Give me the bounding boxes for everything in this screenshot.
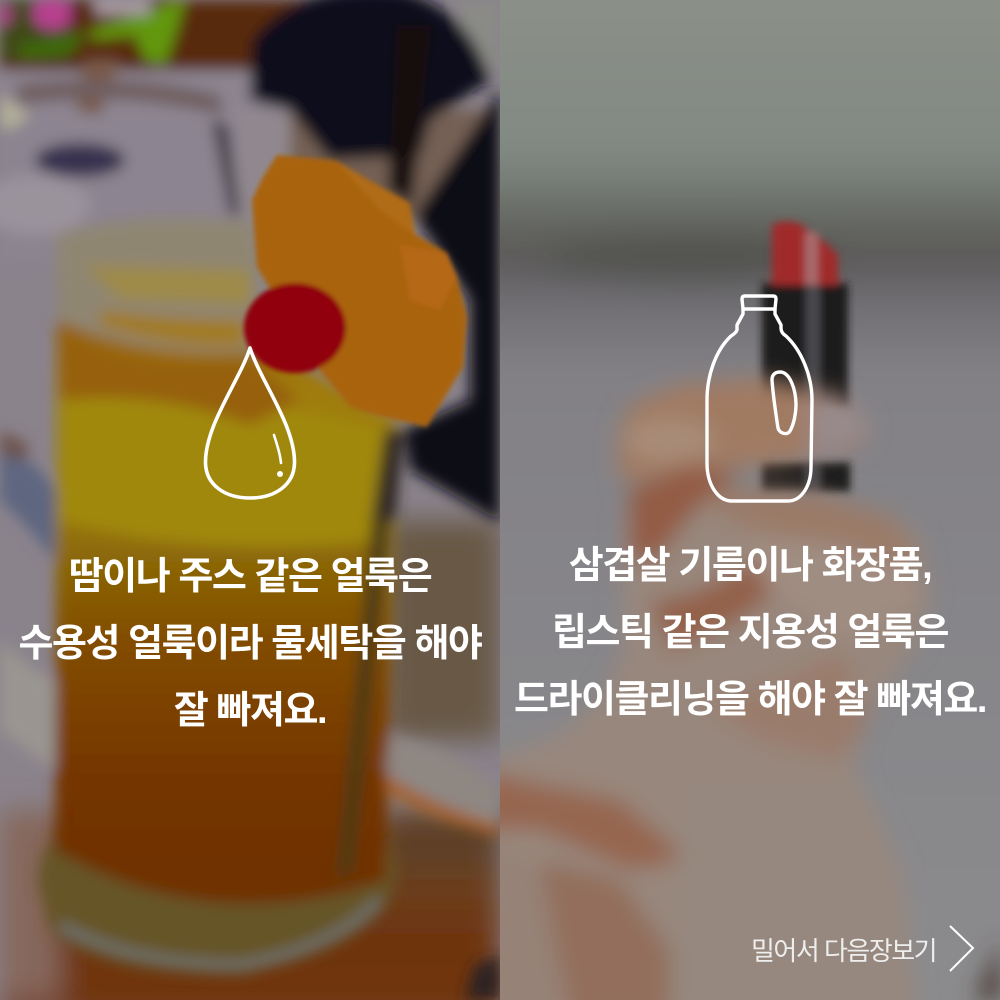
right caption: oil-soluble stains: 삼겹살 기름이나 화장품, xyxy=(569,545,931,587)
right caption: oil-soluble stains: 립스틱 같은 지용성 얼룩은 xyxy=(552,612,948,654)
left caption: water-soluble stains xyxy=(19,556,482,732)
background photo left: iced drink xyxy=(0,0,500,1000)
left caption: water-soluble stains: 땀이나 주스 같은 얼룩은 xyxy=(69,556,431,598)
icon: chevron arrow xyxy=(949,925,974,972)
prompt text: 밀어서 다음장보기 xyxy=(751,936,936,966)
right caption: oil-soluble stains xyxy=(514,545,986,721)
right caption: oil-soluble stains: 드라이클리닝을 해야 잘 빠져요. xyxy=(514,679,986,721)
glass xyxy=(38,830,396,975)
left caption: water-soluble stains: 잘 빠져요. xyxy=(174,690,326,732)
next page prompt with arrow xyxy=(751,925,974,972)
icon: water drop xyxy=(204,346,296,500)
background photo right: hand holding lipstick xyxy=(500,0,1000,1000)
icon: detergent bottle xyxy=(705,294,814,503)
left caption: water-soluble stains: 수용성 얼룩이라 물세탁을 해야 xyxy=(19,623,481,665)
